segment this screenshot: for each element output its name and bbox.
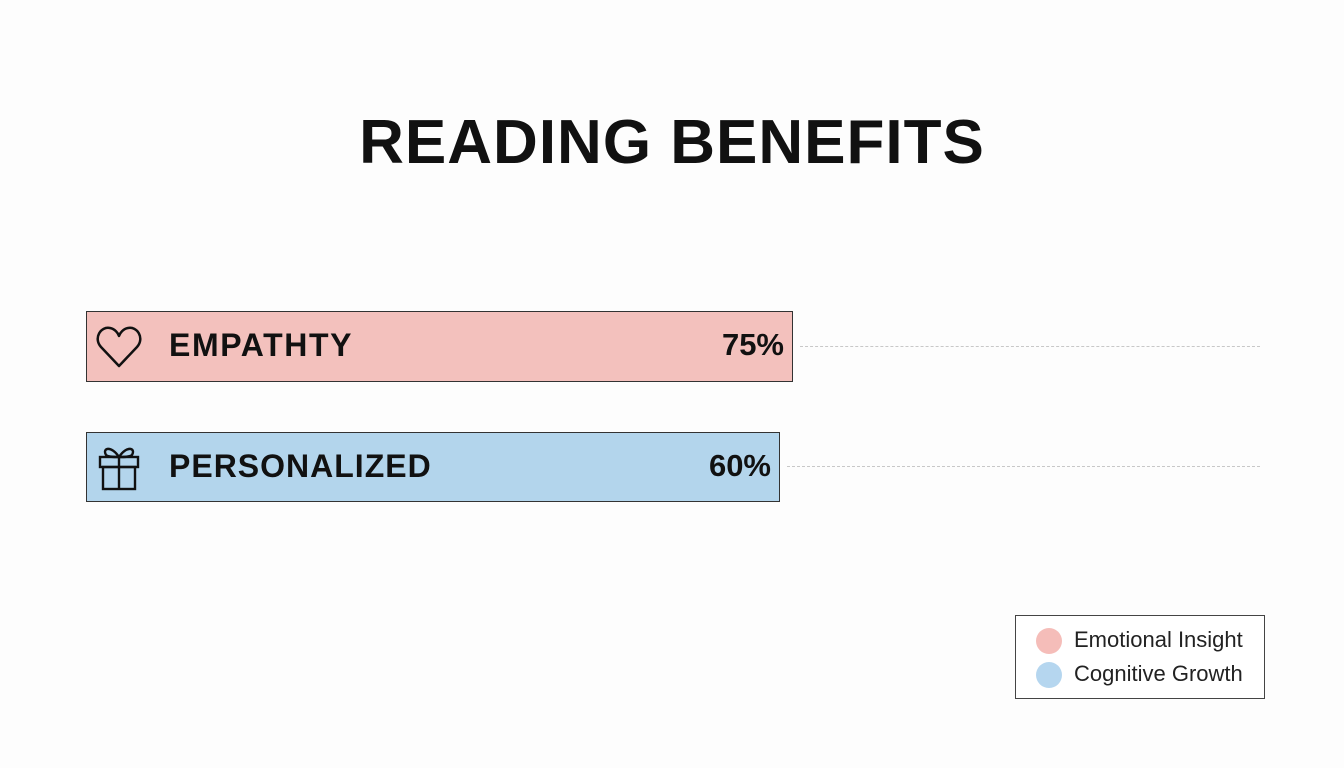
title: READING BENEFITS (359, 108, 985, 177)
value: 75% (722, 327, 784, 362)
dashed guide 1 (800, 346, 1260, 347)
legend item: cognitive: Cognitive Growth (1074, 661, 1243, 686)
label: EMPATHTY (169, 327, 353, 363)
bar: empathy (86, 311, 793, 382)
legend (1015, 615, 1265, 699)
legend item: emotional: Emotional Insight (1074, 627, 1243, 652)
dashed guide 2 (787, 466, 1260, 467)
icon: heart (96, 326, 142, 368)
label: PERSONALIZED (169, 448, 432, 484)
value: 60% (709, 448, 771, 483)
icon: gift (98, 448, 140, 490)
bar: personalized (86, 432, 780, 502)
